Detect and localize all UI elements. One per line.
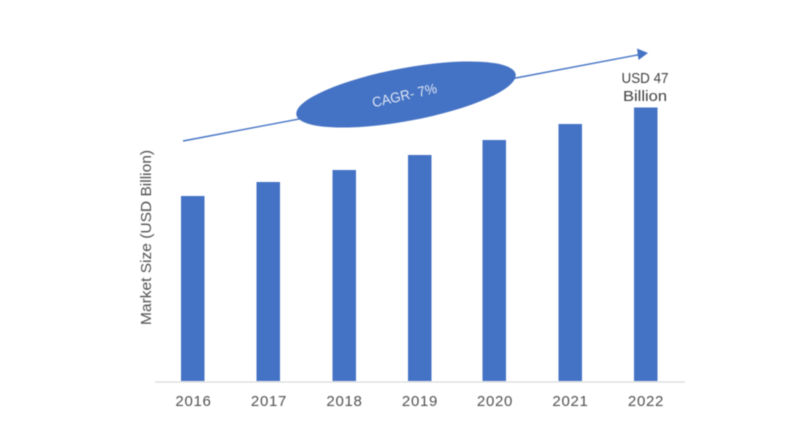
CAGR ellipse callout <box>292 48 520 141</box>
label: 2021: 2021 <box>552 393 589 410</box>
bar: 2018 <box>332 170 356 381</box>
bar: 2022 <box>634 108 658 381</box>
end value callout <box>622 70 668 105</box>
y axis title: Market Size (USD Billion) <box>138 150 155 325</box>
bar: 2019 <box>408 155 432 381</box>
bar: 2017 <box>256 182 280 381</box>
label: 2020: 2020 <box>477 393 513 410</box>
label: 2017: 2017 <box>251 393 287 410</box>
growth arrow <box>183 48 648 141</box>
bar: 2016 <box>181 196 204 381</box>
bars <box>181 108 658 381</box>
label: 2016: 2016 <box>175 393 212 410</box>
label: 2019: 2019 <box>402 393 438 410</box>
end value callout: Billion <box>623 88 667 105</box>
x axis year labels <box>175 393 664 410</box>
bar: 2020 <box>482 140 506 381</box>
label: 2022: 2022 <box>628 393 664 410</box>
bar: 2021 <box>558 124 582 381</box>
end value callout: USD 47 <box>622 70 668 87</box>
x axis line <box>155 381 685 383</box>
CAGR label: CAGR- 7% <box>370 80 438 110</box>
label: 2018: 2018 <box>326 393 363 410</box>
